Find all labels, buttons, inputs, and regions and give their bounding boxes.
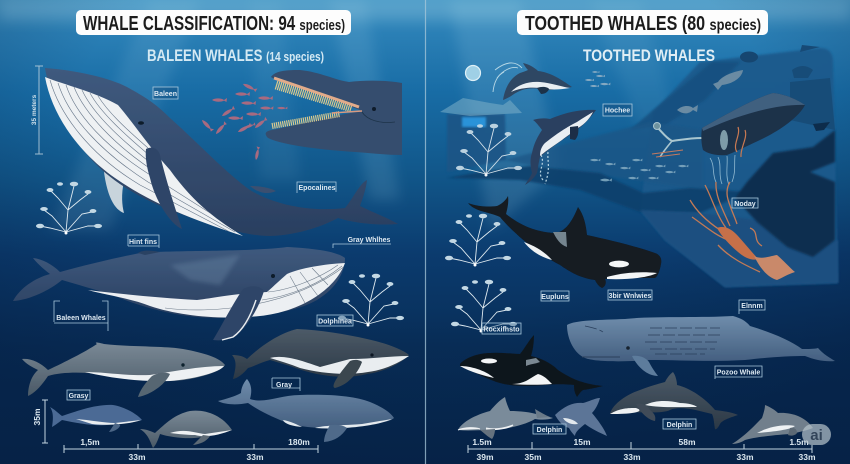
flipper [193, 435, 210, 445]
length axis: toothed: 33m [623, 452, 641, 462]
whale: blue-gray lower right [218, 379, 394, 442]
coral tree: right three [451, 280, 517, 332]
pale tentacled creature [652, 122, 702, 157]
seascape base [640, 48, 838, 287]
flipper [333, 360, 362, 388]
label: bir whales: 3bir Wnlwies [609, 293, 651, 300]
eye [181, 363, 185, 367]
label: pozoo whale [715, 366, 762, 379]
sperm whale head: dark diver [701, 93, 805, 185]
label: baleen [153, 87, 178, 99]
whale eye [372, 107, 376, 111]
dolphin: large gray [610, 372, 738, 429]
dolphin: rising [525, 110, 596, 185]
jaw [582, 356, 620, 358]
coral tree: right one [456, 124, 522, 176]
moon [466, 66, 480, 80]
label: hochee: Hochee [605, 108, 630, 114]
blue glow rectangle [462, 117, 486, 127]
length axis: toothed: 39m [476, 452, 494, 462]
pectoral fin [213, 286, 264, 340]
orca: small [460, 335, 603, 397]
label: gray: Gray [276, 382, 292, 389]
highlight [170, 255, 240, 285]
left dark rock [447, 114, 506, 172]
mid band [505, 122, 703, 190]
rock mound [440, 98, 522, 116]
belly [540, 112, 593, 156]
label: baleen: Baleen [154, 91, 177, 98]
scale bar: 35m: 35m [32, 408, 42, 426]
label: hochee [603, 104, 632, 116]
label: delphin right: Delphin [667, 422, 692, 429]
belly [511, 82, 570, 92]
throat pleats [88, 263, 345, 318]
saddle [553, 232, 567, 247]
head and jaws [266, 70, 402, 155]
whale: sperm [567, 316, 835, 376]
label: dolphinea: Dolphinea [318, 318, 352, 326]
eye [370, 353, 374, 357]
label: pozoo whale: Pozoo Whale [717, 370, 760, 376]
flipper [537, 87, 549, 94]
heading: baleen whales: BALEEN WHALES (14 species) [147, 46, 324, 65]
whale: small blue [50, 405, 142, 432]
flipper [324, 425, 347, 442]
label: eupluns: Eupluns [541, 294, 569, 301]
eye patch [609, 261, 629, 267]
lower blotches [640, 210, 838, 287]
length axis: toothed: 58m [678, 437, 696, 447]
belly [512, 374, 552, 385]
title: toothed whales: TOOTHED WHALES (80 species) [525, 13, 761, 35]
length axis: toothed: 33m [798, 452, 816, 462]
whale: small gray [140, 411, 232, 448]
label: hint fins [128, 235, 159, 248]
dolphin: leaping [493, 63, 572, 100]
coral tree: middle left [338, 274, 404, 326]
label: hint fins: Hint fins [129, 239, 157, 246]
whale: dark fin whale [232, 329, 409, 388]
water drips [540, 152, 548, 184]
ai badge [802, 424, 831, 445]
dolphin: small blue [555, 398, 607, 436]
length axis: baleen: 1,5m [80, 437, 100, 447]
body [45, 68, 398, 236]
flank patch [524, 242, 552, 260]
tentacles [690, 182, 762, 272]
squid arms on whale [735, 127, 746, 157]
gum band [274, 78, 359, 107]
length axis: baleen: 33m [246, 452, 264, 462]
label: gray whales [333, 237, 391, 248]
label: grasy [67, 390, 90, 400]
belly [170, 430, 232, 436]
belly [76, 419, 141, 425]
label: gray [272, 378, 300, 391]
label: delphin left: Delphin [537, 427, 562, 434]
eye [626, 346, 630, 350]
label: epocalines [297, 182, 336, 193]
panel divider [424, 0, 426, 464]
label: rocxifhsto [482, 323, 521, 334]
tail fin [754, 255, 795, 280]
belly [563, 418, 578, 424]
upper diagonal band [630, 62, 740, 130]
label: noday: Noday [734, 201, 756, 208]
mantle [717, 227, 758, 260]
fish: upper right [677, 70, 743, 113]
captured pale mantle [720, 130, 728, 150]
fish school upper [585, 71, 610, 87]
belly [610, 401, 697, 414]
label: elnnm [739, 300, 765, 314]
belly [270, 356, 409, 374]
splash [493, 63, 522, 92]
length axis: baleen: 33m [128, 452, 146, 462]
flipper [636, 403, 655, 421]
dark blobs [740, 52, 758, 62]
ventral pleats [45, 77, 243, 236]
pale strands [710, 155, 735, 185]
label: noday [732, 198, 758, 208]
flipper [788, 428, 797, 436]
giant squid [690, 182, 795, 280]
length axis: baleen [64, 437, 318, 462]
dolphin: lower right [732, 405, 813, 444]
label: baleen whales bracket [54, 301, 108, 331]
label: delphin left [533, 424, 566, 434]
fish school [201, 82, 288, 160]
whale: diving humpback [45, 68, 398, 236]
body [13, 247, 345, 318]
whale: large humpback side view [13, 247, 345, 340]
label: dolphinea [317, 315, 353, 326]
skin fold [362, 112, 395, 123]
whale: gray minke [22, 342, 225, 397]
length axis: toothed: 35m [524, 452, 542, 462]
label: grasy: Grasy [69, 393, 89, 400]
belly patch [607, 272, 657, 279]
fish school lower [590, 159, 688, 182]
whale head: open mouth with baleen [266, 70, 402, 155]
label: delphin right [663, 419, 696, 429]
wrinkles [585, 326, 722, 354]
label: eupluns [541, 291, 569, 301]
belly [458, 425, 513, 430]
length axis: toothed [468, 437, 816, 462]
belly [283, 419, 392, 428]
length axis: toothed: 15m [573, 437, 591, 447]
lower baleen comb [272, 114, 340, 126]
lower ribbon [447, 166, 748, 213]
length axis: toothed: 1.5m [472, 437, 492, 447]
label: rocxifhsto: Rocxifhsto [483, 326, 520, 334]
upper baleen comb [276, 85, 352, 108]
flipper [632, 356, 658, 376]
rear flipper [103, 163, 124, 213]
coral tree: right two [445, 214, 511, 266]
dolphin: lower left [458, 397, 553, 439]
eye [138, 121, 144, 125]
coral tree: upper left [36, 182, 102, 234]
label: epocalines: Epocalines [299, 185, 336, 192]
heading: toothed whales: TOOTHED WHALES [583, 46, 715, 65]
length axis: toothed: 1.5m [789, 437, 809, 447]
chin [460, 366, 494, 378]
label: elnnm: Elnnm [741, 303, 763, 310]
pectoral fin [146, 148, 182, 229]
dorsal fin [138, 251, 160, 255]
label: bir whales [608, 290, 652, 300]
belly [757, 425, 795, 433]
eye [271, 274, 275, 278]
body sheen [702, 93, 805, 131]
length axis: baleen: 180m [288, 437, 310, 447]
label: gray whales: Gray Whlhes [348, 237, 390, 244]
scale bar: whale height: 35 meters [31, 94, 38, 125]
title: whale classification: WHALE CLASSIFICATION: 94 species) [83, 13, 345, 35]
dorsal fin [250, 186, 276, 193]
orca: large [468, 196, 661, 288]
scale bar: 35m [32, 400, 48, 443]
flipper [138, 373, 170, 397]
flipper [480, 429, 495, 439]
flipper [109, 423, 120, 432]
panel: toothed whales dark seascape [447, 45, 838, 287]
label: baleen whales bracket: Baleen Whales [56, 315, 106, 322]
eye patch [481, 358, 497, 364]
right dark mass [735, 130, 835, 257]
length axis: toothed: 33m [736, 452, 754, 462]
belly [85, 366, 224, 381]
scale bar: whale height [31, 66, 43, 154]
flipper [570, 126, 578, 140]
lower gum line [332, 111, 362, 113]
saddle [526, 358, 540, 366]
small dark fish cluster [813, 122, 830, 131]
ai badge: ai [810, 427, 823, 444]
